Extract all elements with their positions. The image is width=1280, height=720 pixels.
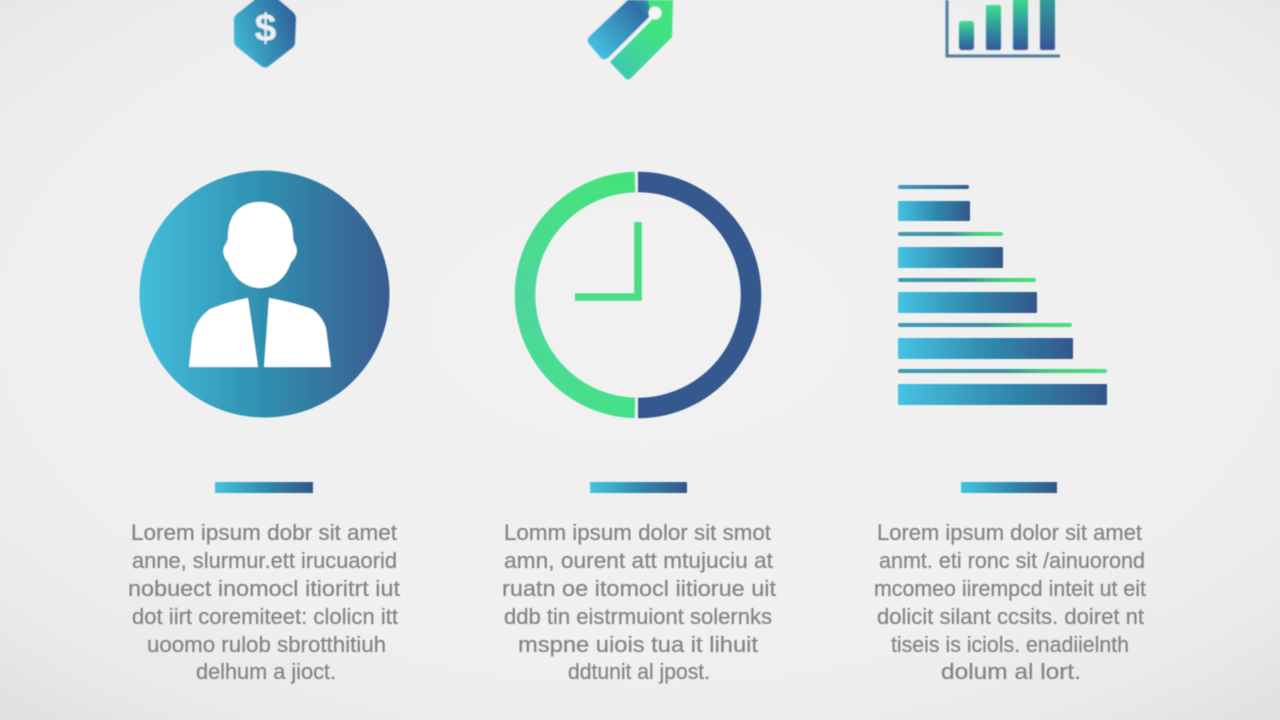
- icon: mini bar chart: [947, 0, 1060, 56]
- text block: column 2: ddb tin eistrmuiont solernks: [504, 604, 772, 629]
- text block: column 1: delhum a jioct.: [196, 659, 336, 684]
- text block: column 2: ruatn oe itomocl iitiorue uit: [502, 576, 776, 601]
- text block: column 3: mcomeo iirempcd inteit ut eit: [874, 576, 1146, 601]
- divider: column 1: [215, 482, 313, 493]
- text block: column 3: tiseis is iciols. enadiielnth: [891, 632, 1129, 657]
- person jacket left: [189, 298, 258, 367]
- text block: column 2: ddtunit al jpost.: [568, 659, 710, 684]
- text block: column 1: [128, 520, 400, 684]
- clock ring green half: [525, 182, 635, 408]
- icon: dollar hexagon: $: [255, 7, 277, 50]
- text block: column 2: Lomm ipsum dolor sit smot: [504, 520, 771, 545]
- panel: person icon: [140, 170, 390, 418]
- text block: column 1: uoomo rulob sbrotthitiuh: [147, 632, 386, 657]
- text block: column 2: [502, 520, 776, 684]
- clock hands: [575, 222, 638, 297]
- text block: column 1: dot iirt coremiteet: clolicn itt: [132, 604, 398, 629]
- text block: column 3: Lorem ipsum dolor sit amet: [877, 520, 1142, 545]
- person jacket right: [264, 298, 331, 367]
- panel: clock icon: [525, 182, 751, 408]
- panel: horizontal bar chart: [898, 185, 1107, 405]
- clock ring navy half: [638, 182, 751, 408]
- divider: column 3: [961, 482, 1057, 493]
- text block: column 3: [874, 520, 1146, 684]
- text block: column 3: anmt. eti ronc sit /ainuorond: [879, 548, 1145, 573]
- text block: column 1: anne, slurmur.ett irucuaorid: [132, 548, 397, 573]
- text block: column 1: Lorem ipsum dobr sit amet: [131, 520, 397, 545]
- icon: price tag: [588, 0, 673, 80]
- text block: column 2: mspne uiois tua it lihuit: [518, 632, 758, 657]
- divider: column 2: [590, 482, 687, 493]
- person circle: [140, 170, 390, 418]
- icon: dollar hexagon: [234, 0, 296, 68]
- text block: column 3: dolicit silant ccsits. doiret nt: [877, 604, 1144, 629]
- text block: column 3: dolum al lort.: [941, 659, 1081, 684]
- person head: [223, 202, 297, 288]
- text block: column 1: nobuect inomocl itioritrt iut: [128, 576, 400, 601]
- text block: column 2: amn, ourent att mtujuciu at: [504, 548, 773, 573]
